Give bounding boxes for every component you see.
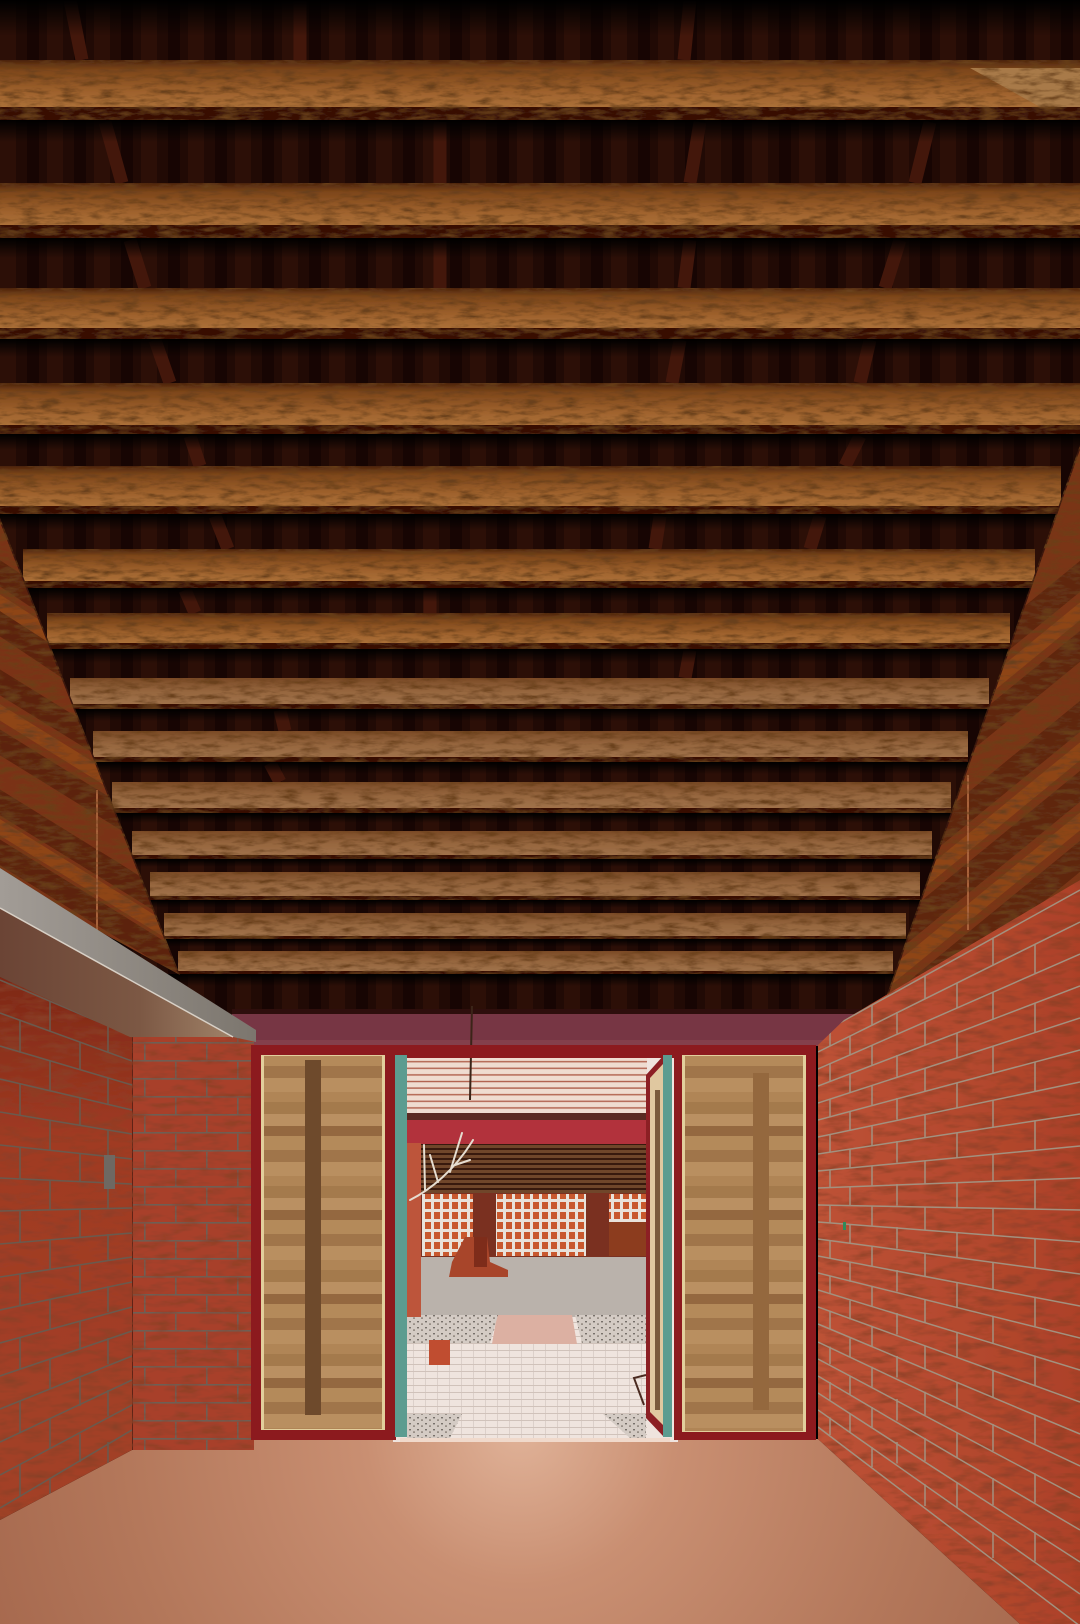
left brick wall: [0, 970, 135, 1541]
icon: wall-mounted light fixture: [104, 1155, 115, 1189]
concrete ledge: [0, 868, 256, 1042]
ceiling beams: [0, 60, 1080, 974]
door frame head over opening: [393, 1045, 675, 1058]
pink path strip: [492, 1315, 577, 1344]
brick lattice screens: [407, 1193, 647, 1258]
tiled roof: [407, 1058, 647, 1113]
paved path: [407, 1317, 647, 1439]
small brick pile: [429, 1340, 450, 1365]
back-left brick wall: [128, 1037, 254, 1450]
vertical batten: [753, 1073, 769, 1410]
gravel beds: [407, 1315, 646, 1438]
concrete courtyard floor: [407, 1257, 647, 1317]
hanging wire with chain: [470, 1006, 472, 1100]
open inner door seen edge-on: [634, 1055, 672, 1437]
right timber-clad wall: [880, 440, 1080, 1020]
stacked bricks: [449, 1237, 508, 1277]
floor: [0, 1439, 1020, 1624]
left door in red frame: [251, 1045, 393, 1440]
covered gallery ceiling: [407, 1144, 647, 1194]
right brick wall: [815, 875, 1080, 1624]
courtyard view through the doorway: [393, 1046, 678, 1442]
brick pier: [407, 1143, 421, 1317]
red steel beam across courtyard: [407, 1113, 647, 1144]
left timber-clad wall: [0, 500, 190, 980]
dark vertical batten: [305, 1060, 321, 1415]
icon: bare white tree branches: [410, 1133, 473, 1200]
bright threshold: [400, 1438, 670, 1442]
right door in red frame: [674, 1045, 816, 1440]
ceiling boards between the beams: [0, 0, 1080, 1020]
teal steel post: [393, 1045, 407, 1440]
courtyard base behind the door leaves: [393, 1046, 678, 1442]
steel lintel beam: [232, 1009, 860, 1046]
